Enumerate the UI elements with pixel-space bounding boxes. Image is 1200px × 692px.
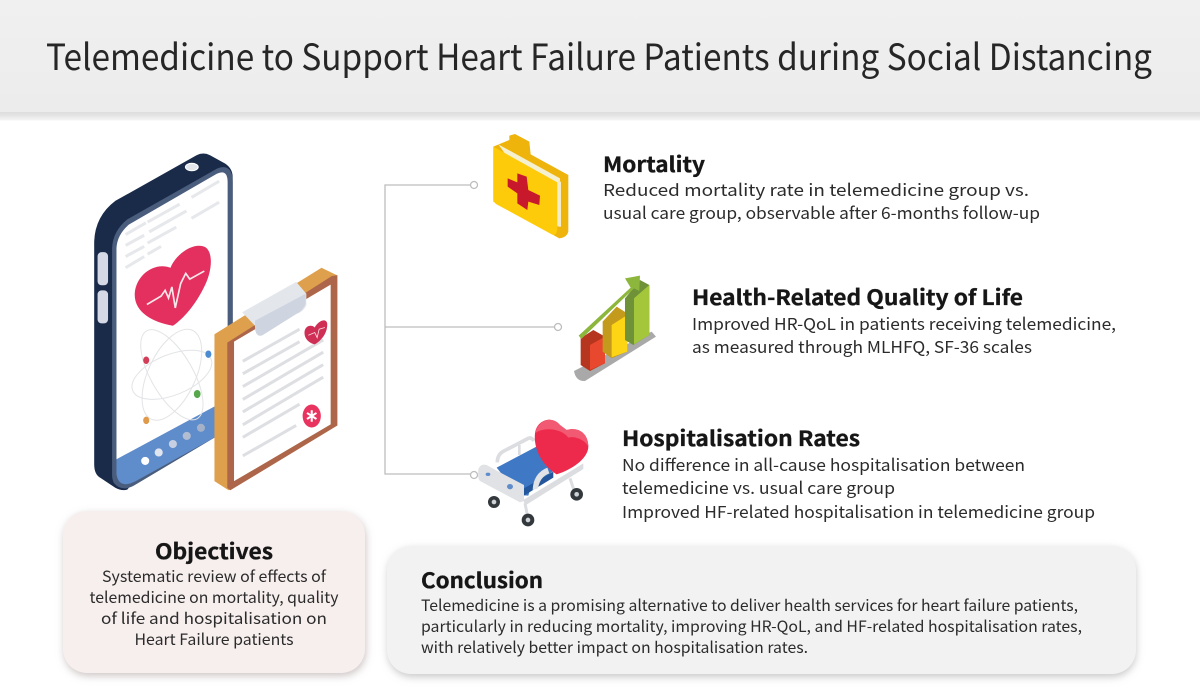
text: objectives: telemedicine on mortality, quality: [90, 586, 338, 608]
icon: folder: [493, 134, 568, 238]
phone heart: [135, 246, 211, 326]
text: objectives: [90, 565, 338, 650]
heading: objectives: Objectives: [155, 536, 273, 566]
text: conclusion: with relatively better impact on hospitalisation rates.: [421, 636, 808, 658]
text: mortality: Reduced mortality rate in telemedicine group vs.: [603, 177, 1029, 201]
icon: hospital bed: [478, 420, 588, 526]
title banner: [0, 0, 1200, 118]
clipboard medical badge: [303, 404, 321, 427]
red cross: [508, 173, 540, 210]
icon: bar chart: [574, 276, 656, 381]
phone text lines: [126, 181, 219, 268]
phone buttons: [98, 252, 108, 323]
text: conclusion: Telemedicine is a promising alternative to deliver health services for heart failure patients,: [421, 594, 1078, 616]
text: quality of life: Improved HR-QoL in patients receiving telemedicine,: [692, 311, 1116, 335]
text: hospitalisation rates: telemedicine vs. usual care group: [622, 475, 895, 499]
text: conclusion: particularly in reducing mortality, improving HR-QoL, and HF-related hospitalisation rates,: [421, 615, 1082, 637]
phone dots: [141, 424, 205, 465]
text: hospitalisation rates: No difference in all-cause hospitalisation between: [622, 452, 1025, 476]
phone atom: [125, 320, 219, 429]
heading: quality of life: Health-Related Quality of Life: [692, 282, 1023, 312]
phone speaker: [185, 163, 198, 171]
text: quality of life: [692, 311, 1116, 358]
text: objectives: Systematic review of effects of: [102, 565, 327, 587]
text: objectives: Heart Failure patients: [134, 628, 294, 650]
text: quality of life: as measured through MLHFQ, SF-36 scales: [692, 334, 1032, 358]
heading: conclusion: Conclusion: [421, 565, 543, 595]
icon: clipboard: [214, 268, 337, 490]
clipboard heart: [304, 320, 327, 344]
text: conclusion: [421, 594, 1082, 658]
text: mortality: [603, 177, 1040, 224]
text: hospitalisation rates: Improved HF-related hospitalisation in telemedicine group: [622, 499, 1095, 523]
heading: mortality: Mortality: [603, 149, 705, 179]
clipboard clip: [242, 282, 306, 336]
text: mortality: usual care group, observable after 6-months follow-up: [603, 200, 1040, 224]
clipboard lines: [243, 329, 323, 456]
text: objectives: of life and hospitalisation on: [101, 607, 327, 629]
text: hospitalisation rates: [622, 452, 1095, 523]
connector lines: [385, 182, 562, 478]
panel: objectives: [63, 511, 366, 676]
heading: hospitalisation rates: Hospitalisation Rates: [622, 423, 860, 453]
icon: phone: [94, 154, 233, 490]
panel: conclusion: [387, 546, 1136, 677]
